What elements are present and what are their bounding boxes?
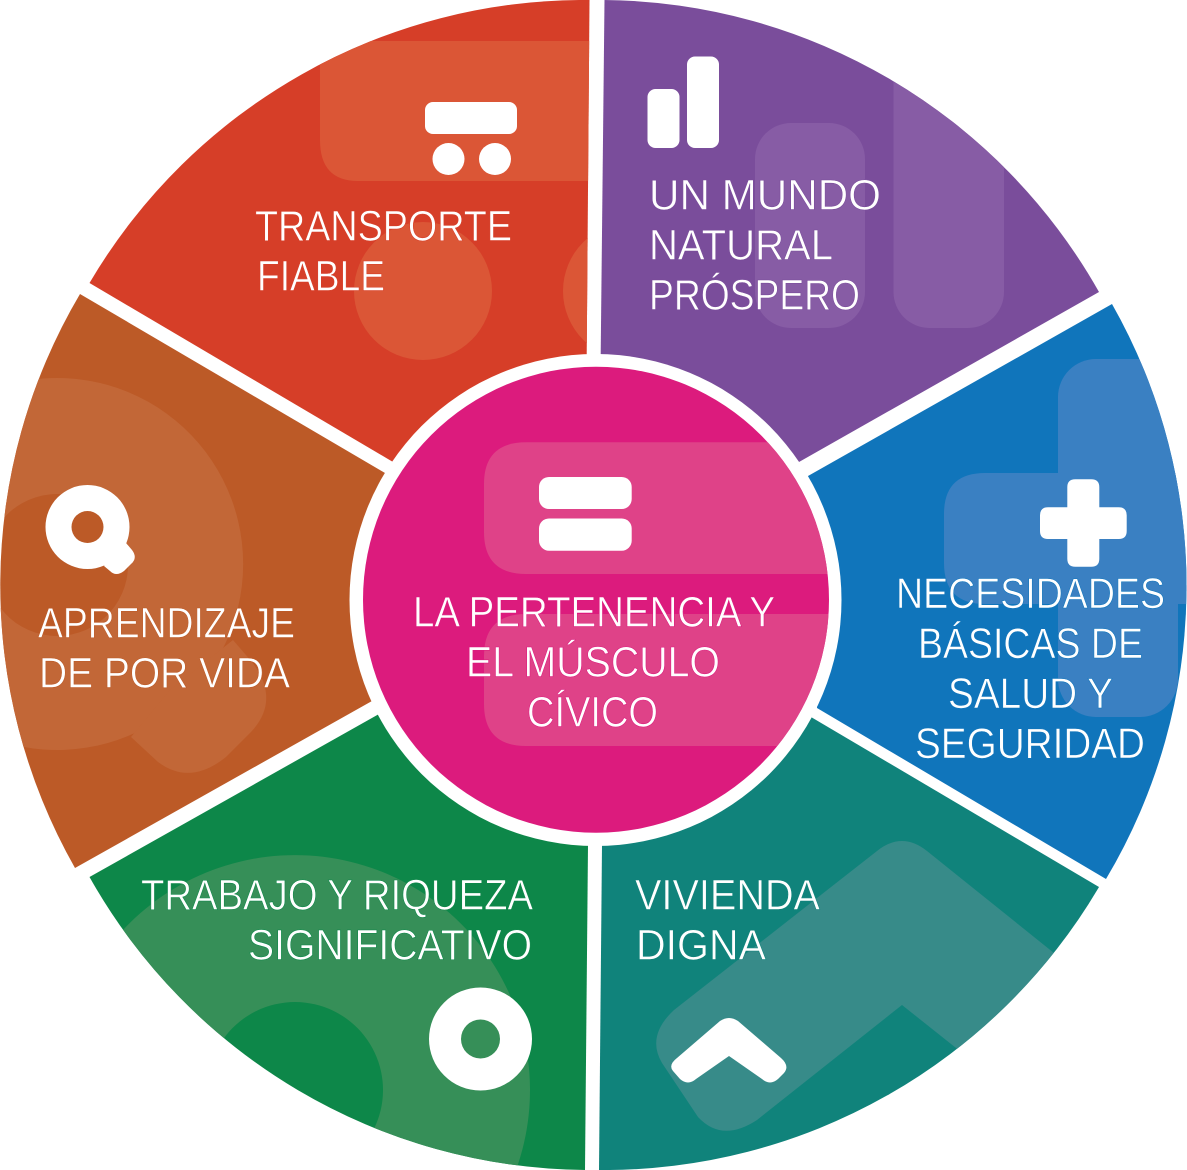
- label: vivienda digna: DIGNA: [636, 921, 766, 969]
- label: la pertenencia y el musculo civico: LA PERTENENCIA Y: [413, 589, 775, 637]
- label: un mundo natural prospero: PRÓSPERO: [649, 272, 860, 320]
- icon: plus: [1040, 479, 1127, 567]
- icon: transport: [425, 102, 517, 175]
- icon: bars: [648, 56, 719, 148]
- label: aprendizaje de por vida: DE POR VIDA: [39, 649, 290, 697]
- background shapes: bars motif: [755, 81, 1004, 328]
- label: transporte fiable: FIABLE: [257, 253, 385, 301]
- label: aprendizaje de por vida: APRENDIZAJE: [38, 599, 295, 647]
- icon: roof chevron: [671, 1018, 786, 1082]
- label: transporte fiable: [255, 203, 512, 301]
- label: vivienda digna: VIVIENDA: [635, 871, 820, 919]
- label: necesidades basicas de salud y seguridad: [896, 570, 1165, 768]
- orange sector: [0, 294, 385, 868]
- icon: equals: [539, 477, 632, 551]
- white ring around centre: [350, 354, 842, 846]
- panel: un mundo natural prospero: [601, 0, 1099, 462]
- label: necesidades basicas de salud y seguridad: SALUD Y: [948, 670, 1113, 718]
- panel: trabajo y riqueza: [60, 714, 588, 1170]
- label: trabajo y riqueza significativo: [141, 871, 533, 969]
- panel: aprendizaje de por vida: [0, 294, 385, 868]
- pink circle: [363, 367, 829, 833]
- panel: necesidades basicas: [808, 304, 1187, 879]
- label: aprendizaje de por vida: [38, 599, 295, 697]
- label: vivienda digna: [635, 871, 820, 969]
- background shape: ring motif: [123, 855, 530, 1166]
- icon: magnifier: [46, 485, 135, 574]
- teal sector: [599, 717, 1099, 1170]
- label: transporte fiable: TRANSPORTE: [255, 203, 512, 251]
- label: necesidades basicas de salud y seguridad: SEGURIDAD: [915, 720, 1145, 768]
- label: necesidades basicas de salud y seguridad: BÁSICAS DE: [918, 620, 1143, 668]
- background shapes: plus motif: [944, 359, 1187, 717]
- panel: centre, la pertenencia y el musculo civico: [363, 367, 829, 833]
- label: un mundo natural prospero: UN MUNDO: [649, 172, 881, 220]
- background shape: roof motif: [656, 841, 1054, 1131]
- background shapes: equals motif: [484, 442, 829, 746]
- label: la pertenencia y el musculo civico: CÍVICO: [527, 689, 658, 737]
- blue sector: [808, 304, 1187, 879]
- label: un mundo natural prospero: NATURAL: [649, 222, 833, 270]
- label: la pertenencia y el musculo civico: EL MÚSCULO: [466, 639, 720, 687]
- label: la pertenencia y el musculo civico: [413, 589, 775, 737]
- label: trabajo y riqueza significativo: TRABAJO Y RIQUEZA: [141, 871, 533, 919]
- background shapes: transport motif: [320, 41, 590, 360]
- purple sector: [601, 0, 1099, 462]
- panel: vivienda digna: [599, 717, 1110, 1170]
- label: un mundo natural prospero: [649, 172, 881, 320]
- icon: ring: [429, 988, 532, 1090]
- green sector: [90, 714, 588, 1170]
- label: trabajo y riqueza significativo: SIGNIFICATIVO: [248, 921, 532, 969]
- panel: transporte fiable: [90, 0, 590, 462]
- background shape: magnifier motif: [0, 378, 266, 773]
- red sector: [90, 0, 590, 462]
